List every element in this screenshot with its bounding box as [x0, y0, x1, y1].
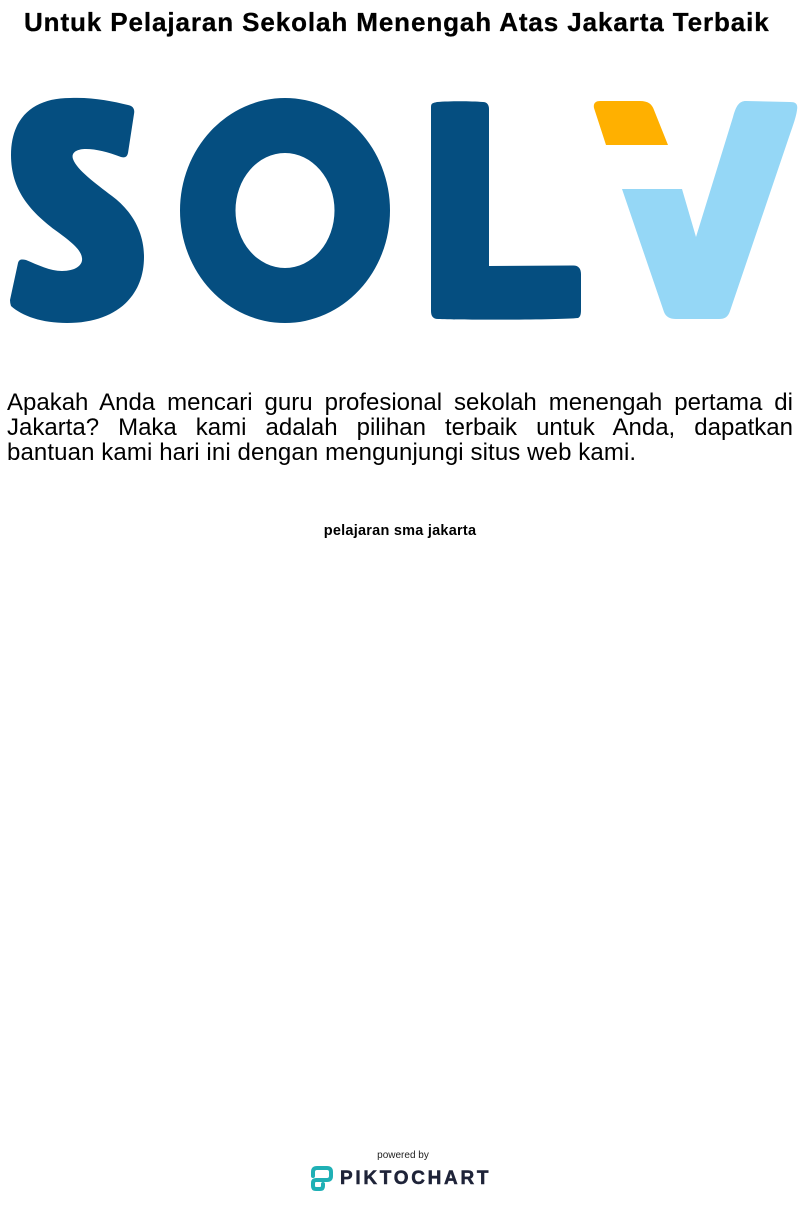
logo letter L	[431, 101, 581, 320]
logo letter V	[622, 101, 797, 319]
logo: SOLV	[10, 98, 798, 323]
title: Untuk Pelajaran Sekolah Menengah Atas Jakarta Terbaik	[24, 7, 770, 37]
logo letter O	[180, 98, 390, 323]
body text: bantuan kami hari ini dengan mengunjungi situs web kami.	[7, 439, 636, 466]
body text	[7, 389, 793, 466]
icon: Piktochart mark	[311, 1166, 333, 1191]
body text: Apakah Anda mencari guru profesional sekolah menengah pertama di	[7, 389, 793, 416]
footer: powered by Piktochart	[311, 1150, 491, 1191]
powered by label: powered by	[377, 1150, 429, 1161]
logo letter S	[10, 98, 144, 323]
Piktochart wordmark: PIKTOCHART	[340, 1168, 491, 1189]
body text: Jakarta? Maka kami adalah pilihan terbaik untuk Anda, dapatkan	[7, 414, 793, 441]
link text: pelajaran sma jakarta	[324, 523, 476, 539]
logo accent: yellow block	[594, 101, 668, 145]
